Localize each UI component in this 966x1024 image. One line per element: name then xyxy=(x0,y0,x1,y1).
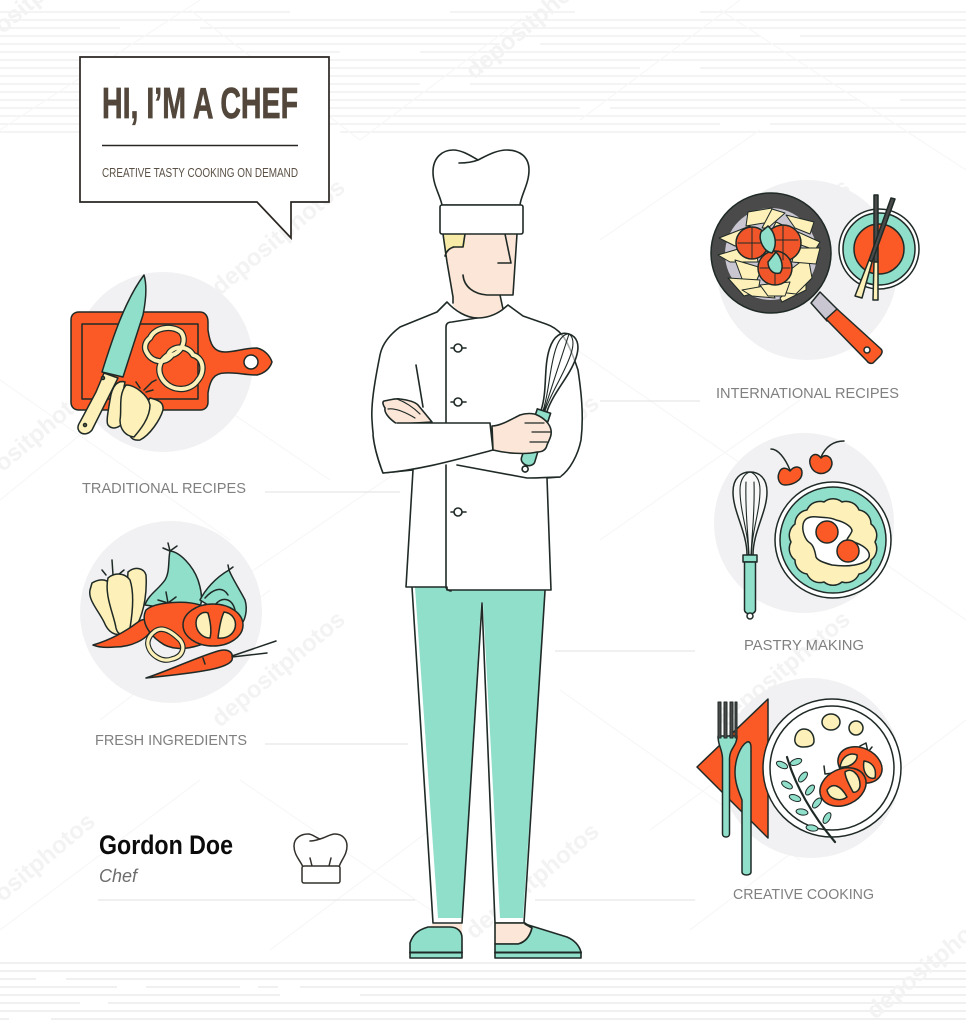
label: traditional recipes: TRADITIONAL RECIPES xyxy=(82,480,246,497)
knife xyxy=(78,275,146,434)
cut tomato xyxy=(183,604,243,646)
fried eggs xyxy=(803,517,869,566)
carrot lower xyxy=(146,641,276,678)
tomato xyxy=(144,592,211,648)
head xyxy=(443,234,517,318)
rosemary sprig xyxy=(775,757,835,842)
connector lines xyxy=(98,401,700,900)
bowl xyxy=(839,209,919,289)
whisk xyxy=(733,472,767,619)
lower forearm xyxy=(373,423,575,478)
penne xyxy=(718,208,820,302)
chef figure xyxy=(372,150,582,958)
icon: small chef hat xyxy=(294,834,347,883)
icon: cutting board and pepper xyxy=(71,272,272,452)
sliced pepper rings xyxy=(145,328,202,389)
watermark: depositphotos xyxy=(461,818,605,945)
arm left hand xyxy=(383,399,432,424)
napkin xyxy=(697,699,768,838)
whisk xyxy=(511,330,582,476)
pepper half xyxy=(107,380,163,440)
watermark: depositphotos xyxy=(712,174,856,301)
basil leaves xyxy=(760,226,782,273)
watermark: depositphotos xyxy=(207,174,351,301)
hand holding whisk xyxy=(492,414,551,453)
pear xyxy=(145,543,201,612)
plate xyxy=(763,699,901,837)
onion xyxy=(200,565,246,625)
name: Gordon Doe xyxy=(99,830,233,860)
pastry blob xyxy=(789,499,877,585)
role: Chef xyxy=(99,866,139,886)
chef hat xyxy=(433,150,529,234)
label: fresh ingredients: FRESH INGREDIENTS xyxy=(95,732,247,749)
watermark: depositphotos xyxy=(461,390,605,517)
label: creative cooking: CREATIVE COOKING xyxy=(733,886,874,903)
subtitle: CREATIVE TASTY COOKING ON DEMAND xyxy=(102,165,298,180)
shoes xyxy=(410,923,581,958)
fork xyxy=(718,702,737,837)
pepper ring xyxy=(148,629,183,660)
icon: whisk and egg plate xyxy=(714,433,894,619)
watermark: depositphotos xyxy=(712,606,856,733)
carrot upper xyxy=(93,620,152,647)
label: international recipes: INTERNATIONAL RECIPES xyxy=(716,385,899,402)
chef jacket xyxy=(372,302,582,591)
tomato slices xyxy=(736,225,801,285)
icon: plate with cutlery xyxy=(697,678,901,875)
label: pastry making: PASTRY MAKING xyxy=(744,637,864,654)
icon: pan with pasta and bowl xyxy=(711,180,919,363)
title: HI, I’M A CHEF xyxy=(102,79,298,128)
chopsticks xyxy=(855,195,895,300)
yellow pepper xyxy=(90,560,146,634)
plate xyxy=(775,482,891,598)
potatoes xyxy=(795,714,863,747)
tomato slices xyxy=(814,740,888,813)
knife xyxy=(735,742,751,875)
speech bubble xyxy=(80,57,329,238)
cherries xyxy=(771,441,844,485)
name block xyxy=(99,830,233,886)
watermark: depositphotos xyxy=(207,606,351,733)
icon: fresh vegetables xyxy=(80,521,276,703)
pan handle xyxy=(811,292,882,363)
pants xyxy=(412,587,545,923)
